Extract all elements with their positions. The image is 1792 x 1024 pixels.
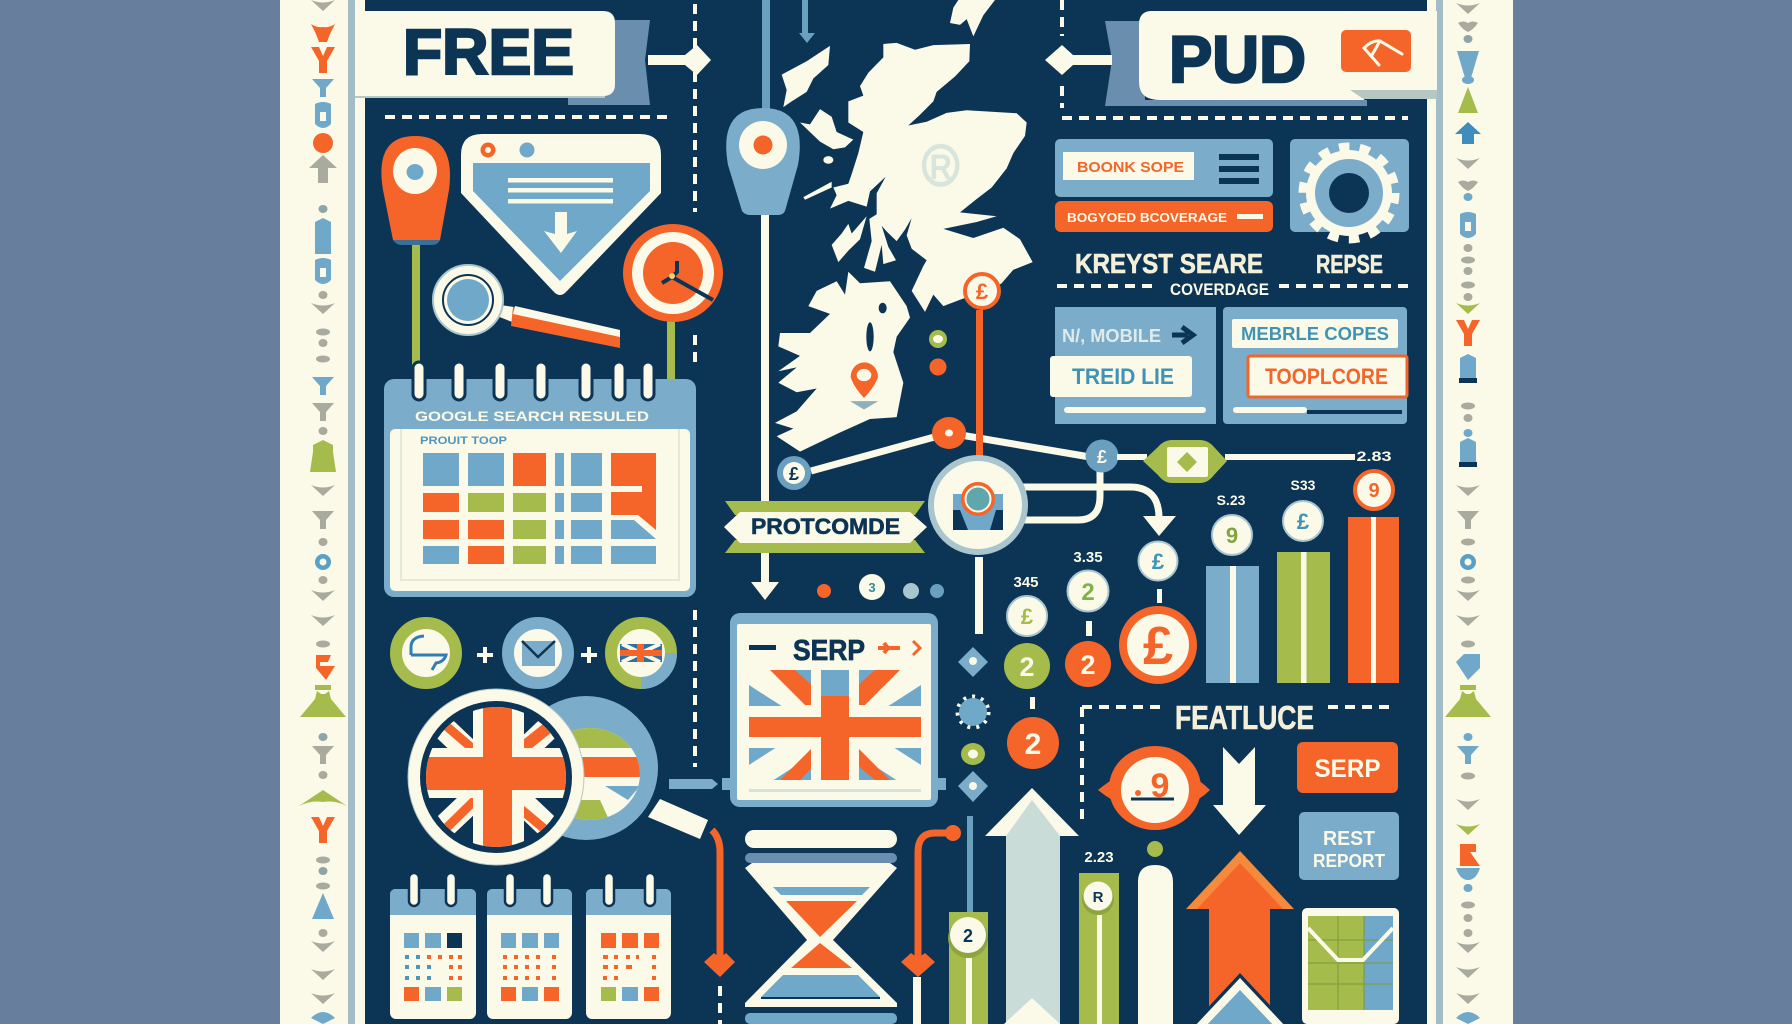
right decorative icon strip bbox=[1445, 3, 1491, 1024]
arrow: orange right down bbox=[901, 825, 961, 1024]
coin on green bar bbox=[1283, 501, 1323, 541]
icon: mail circle bbox=[508, 623, 568, 683]
left decorative icon strip bbox=[299, 0, 347, 1024]
coin large pound: £ bbox=[1143, 616, 1173, 676]
icon: gear panel bbox=[1290, 139, 1409, 240]
green connector tag bbox=[1143, 440, 1227, 483]
label S.23: S.23 bbox=[1217, 492, 1246, 508]
icon: blue pin bbox=[726, 108, 800, 215]
coin green pound bbox=[1007, 596, 1047, 636]
arrow: cream down bbox=[1213, 747, 1266, 835]
dots row under ribbon: 3 bbox=[868, 580, 876, 595]
coin on blue bar bbox=[1212, 515, 1252, 555]
pipe lines from search circle bbox=[1020, 487, 1159, 518]
right panel: keyword scope bbox=[1055, 139, 1273, 232]
right panel: mobile copes: MEBRLE COPES bbox=[1241, 324, 1389, 344]
calendar sub heading: PROUIT TOOP bbox=[420, 435, 507, 447]
calendars row bbox=[390, 873, 671, 1019]
button: SERP: SERP bbox=[1314, 755, 1380, 783]
pound node right: £ bbox=[1097, 447, 1107, 467]
coin on orange bar: 9 bbox=[1368, 480, 1380, 502]
union flag bbox=[745, 667, 925, 783]
icon: magnifying glass bbox=[433, 265, 620, 348]
icon: second lens with flag bbox=[549, 696, 708, 840]
calendar: google search results bbox=[384, 362, 696, 597]
coin on blue bar: 9 bbox=[1226, 523, 1238, 548]
heading: keyword search: KREYST SEARE bbox=[1075, 248, 1263, 279]
dots row under ribbon bbox=[817, 574, 944, 600]
plus bbox=[477, 647, 493, 663]
right panel: mobile copes bbox=[1223, 307, 1407, 424]
calendar 2 bbox=[487, 873, 572, 1019]
bar chart: pound values bbox=[1206, 471, 1399, 683]
map: ireland bbox=[775, 272, 910, 452]
map: islands bbox=[782, 0, 995, 262]
icon: map tile bbox=[1302, 908, 1399, 1024]
bar: orange bbox=[1348, 517, 1399, 683]
bar: green with coin right bbox=[1079, 849, 1119, 1024]
arrow: large pale up bbox=[985, 788, 1079, 1024]
coin green outline 2 bbox=[1068, 570, 1108, 612]
icon: target clock bbox=[623, 224, 723, 379]
connector: PUD to map bbox=[1045, 45, 1112, 75]
heading: FREE: FREE bbox=[403, 16, 574, 88]
magnifier handle bbox=[648, 799, 708, 839]
banner: PUD bbox=[1045, 11, 1437, 106]
right panel: mobile: N/, MOBILE bbox=[1062, 326, 1161, 346]
bar: green with coin left: 2 bbox=[963, 926, 973, 946]
value label: 2.83 bbox=[1356, 448, 1392, 464]
pound node left: £ bbox=[789, 464, 799, 484]
icon: orange badge bbox=[1341, 30, 1411, 72]
coin green pound: £ bbox=[1021, 604, 1034, 629]
map markers dots bbox=[929, 330, 947, 376]
small node column bbox=[958, 647, 988, 802]
coin orange 2: 2 bbox=[1080, 650, 1096, 680]
map: ireland location pin bbox=[850, 362, 878, 409]
heading: feature: FEATLUCE bbox=[1175, 699, 1314, 736]
coin orange 2 bbox=[1065, 641, 1111, 687]
coin teal pound: £ bbox=[1152, 549, 1165, 574]
heading: repse: REPSE bbox=[1316, 249, 1383, 279]
banner: FREE bbox=[355, 11, 711, 105]
calendar binder rings bbox=[413, 362, 654, 400]
bar: green bbox=[1277, 552, 1330, 683]
button: REST REPORT: REST bbox=[1323, 828, 1375, 850]
right panel: mobile bbox=[1050, 307, 1216, 424]
button: REST REPORT: REPORT bbox=[1313, 851, 1385, 871]
right panel: keyword scope: BOGYOED BCOVERAGE bbox=[1067, 210, 1227, 225]
ribbon: PROTCOMDE: PROTCOMDE bbox=[751, 514, 900, 539]
calendar heading: GOOGLE SEARCH RESULED bbox=[415, 408, 649, 424]
value 3.35: 3.35 bbox=[1073, 549, 1103, 566]
bar: green with coin left bbox=[948, 816, 988, 1024]
capsule column bbox=[1138, 841, 1173, 1024]
icon: big search circle bbox=[931, 458, 1025, 634]
pound pin on map: £ bbox=[976, 279, 989, 304]
map: UK and Ireland bbox=[775, 0, 1033, 452]
heading: PUD: PUD bbox=[1169, 22, 1306, 96]
map: R watermark bbox=[924, 146, 957, 187]
right panel: mobile: TREID LIE bbox=[1072, 364, 1174, 389]
label S33: S33 bbox=[1291, 477, 1316, 493]
coin teal pound bbox=[1138, 542, 1178, 580]
coin large pound bbox=[1123, 610, 1193, 680]
coin on green bar: £ bbox=[1297, 509, 1310, 534]
coin orange 2 large: 2 bbox=[1025, 728, 1041, 761]
icon: orange location pin bbox=[381, 136, 450, 373]
network lines and pound nodes bbox=[777, 274, 1392, 536]
map: great britain bbox=[830, 43, 1033, 312]
chart: pound coin sequence bbox=[1004, 542, 1193, 769]
cream poster panel bbox=[280, 0, 1513, 1024]
pound pin on map bbox=[965, 274, 999, 308]
plus bbox=[581, 647, 597, 663]
dashed separators bbox=[385, 0, 1408, 1024]
heading: coverage: COVERDAGE bbox=[1170, 280, 1269, 299]
icon: orange medallion bbox=[1098, 746, 1210, 830]
coin orange 2 large bbox=[1007, 717, 1059, 769]
pound node left bbox=[777, 456, 811, 490]
icon: orange medallion: 9 bbox=[1151, 767, 1169, 805]
calendar 1 bbox=[390, 873, 476, 1019]
right panel: keyword scope: BOONK SOPE bbox=[1077, 159, 1184, 176]
right panel: mobile copes: TOOPLCORE bbox=[1265, 364, 1388, 389]
arrow: blue top stem with pin bbox=[726, 0, 815, 600]
connector: FREE to map bbox=[648, 45, 711, 75]
coin green 2: 2 bbox=[1019, 652, 1035, 682]
bar: green with coin right: 2.23 bbox=[1084, 849, 1114, 866]
icon: hourglass bbox=[745, 830, 897, 1024]
small connector bar bbox=[669, 779, 718, 789]
coin green 2 bbox=[1004, 643, 1050, 689]
calendar colour grid bbox=[423, 453, 656, 564]
calendar 3 bbox=[586, 873, 671, 1019]
orange hub node bbox=[932, 417, 966, 449]
icon: browser shield with download arrow bbox=[461, 134, 661, 295]
arrow: large orange up bbox=[1186, 851, 1294, 1024]
coin green outline 2: 2 bbox=[1081, 579, 1095, 606]
arrow: orange left down bbox=[704, 830, 735, 977]
icon row: three circles bbox=[396, 623, 671, 683]
value 345: 345 bbox=[1013, 574, 1039, 591]
button: REST REPORT bbox=[1299, 812, 1399, 880]
icon: flag circle bbox=[611, 623, 671, 683]
coin on orange bar bbox=[1355, 471, 1393, 509]
bar: green with coin right: R bbox=[1093, 889, 1104, 906]
pound node right bbox=[1086, 440, 1118, 472]
button: SERP bbox=[1297, 742, 1398, 793]
map: R watermark: R bbox=[930, 147, 952, 187]
bar: blue bbox=[1206, 566, 1259, 683]
icon: green tub circle bbox=[396, 623, 456, 683]
icon: main magnifier with union flag bbox=[408, 689, 584, 865]
ribbon: PROTCOMDE bbox=[724, 501, 927, 553]
panel: SERP flag frame bbox=[722, 613, 946, 807]
SERP heading: SERP bbox=[793, 635, 865, 667]
